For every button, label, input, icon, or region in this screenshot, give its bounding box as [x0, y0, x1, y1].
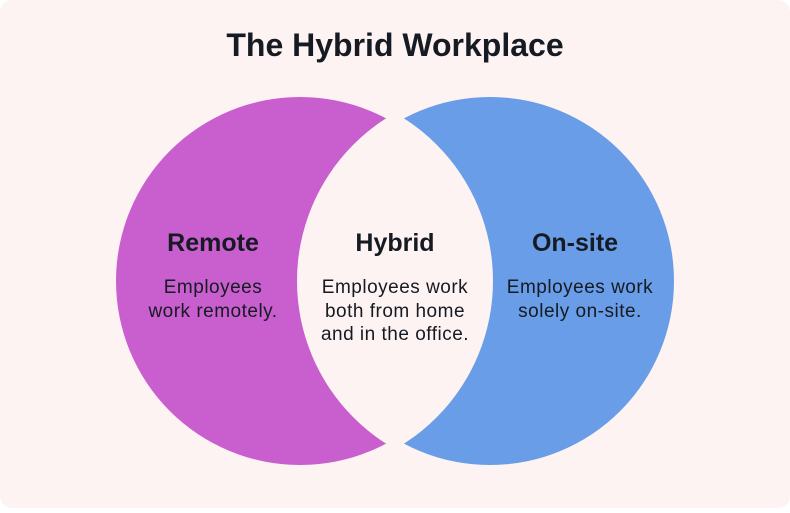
shape: on-site crescent — [404, 97, 674, 465]
text block: on-site — [507, 229, 653, 322]
text block: on-site: On-site — [532, 229, 618, 257]
text block: remote: work remotely. — [147, 301, 278, 322]
text block: remote: Remote — [167, 229, 259, 257]
text block: hybrid — [321, 229, 469, 345]
text block: hybrid: Employees work — [322, 277, 468, 298]
text block: hybrid: and in the office. — [321, 324, 469, 345]
text block: remote — [147, 229, 278, 322]
text block: on-site: Employees work — [507, 277, 653, 298]
shape: remote crescent — [116, 97, 386, 465]
text block: hybrid: both from home — [325, 301, 465, 322]
text block: remote: Employees — [164, 277, 262, 298]
text block: hybrid: Hybrid — [355, 229, 435, 257]
title: The Hybrid Workplace — [226, 27, 564, 63]
text block: on-site: solely on-site. — [518, 301, 642, 322]
